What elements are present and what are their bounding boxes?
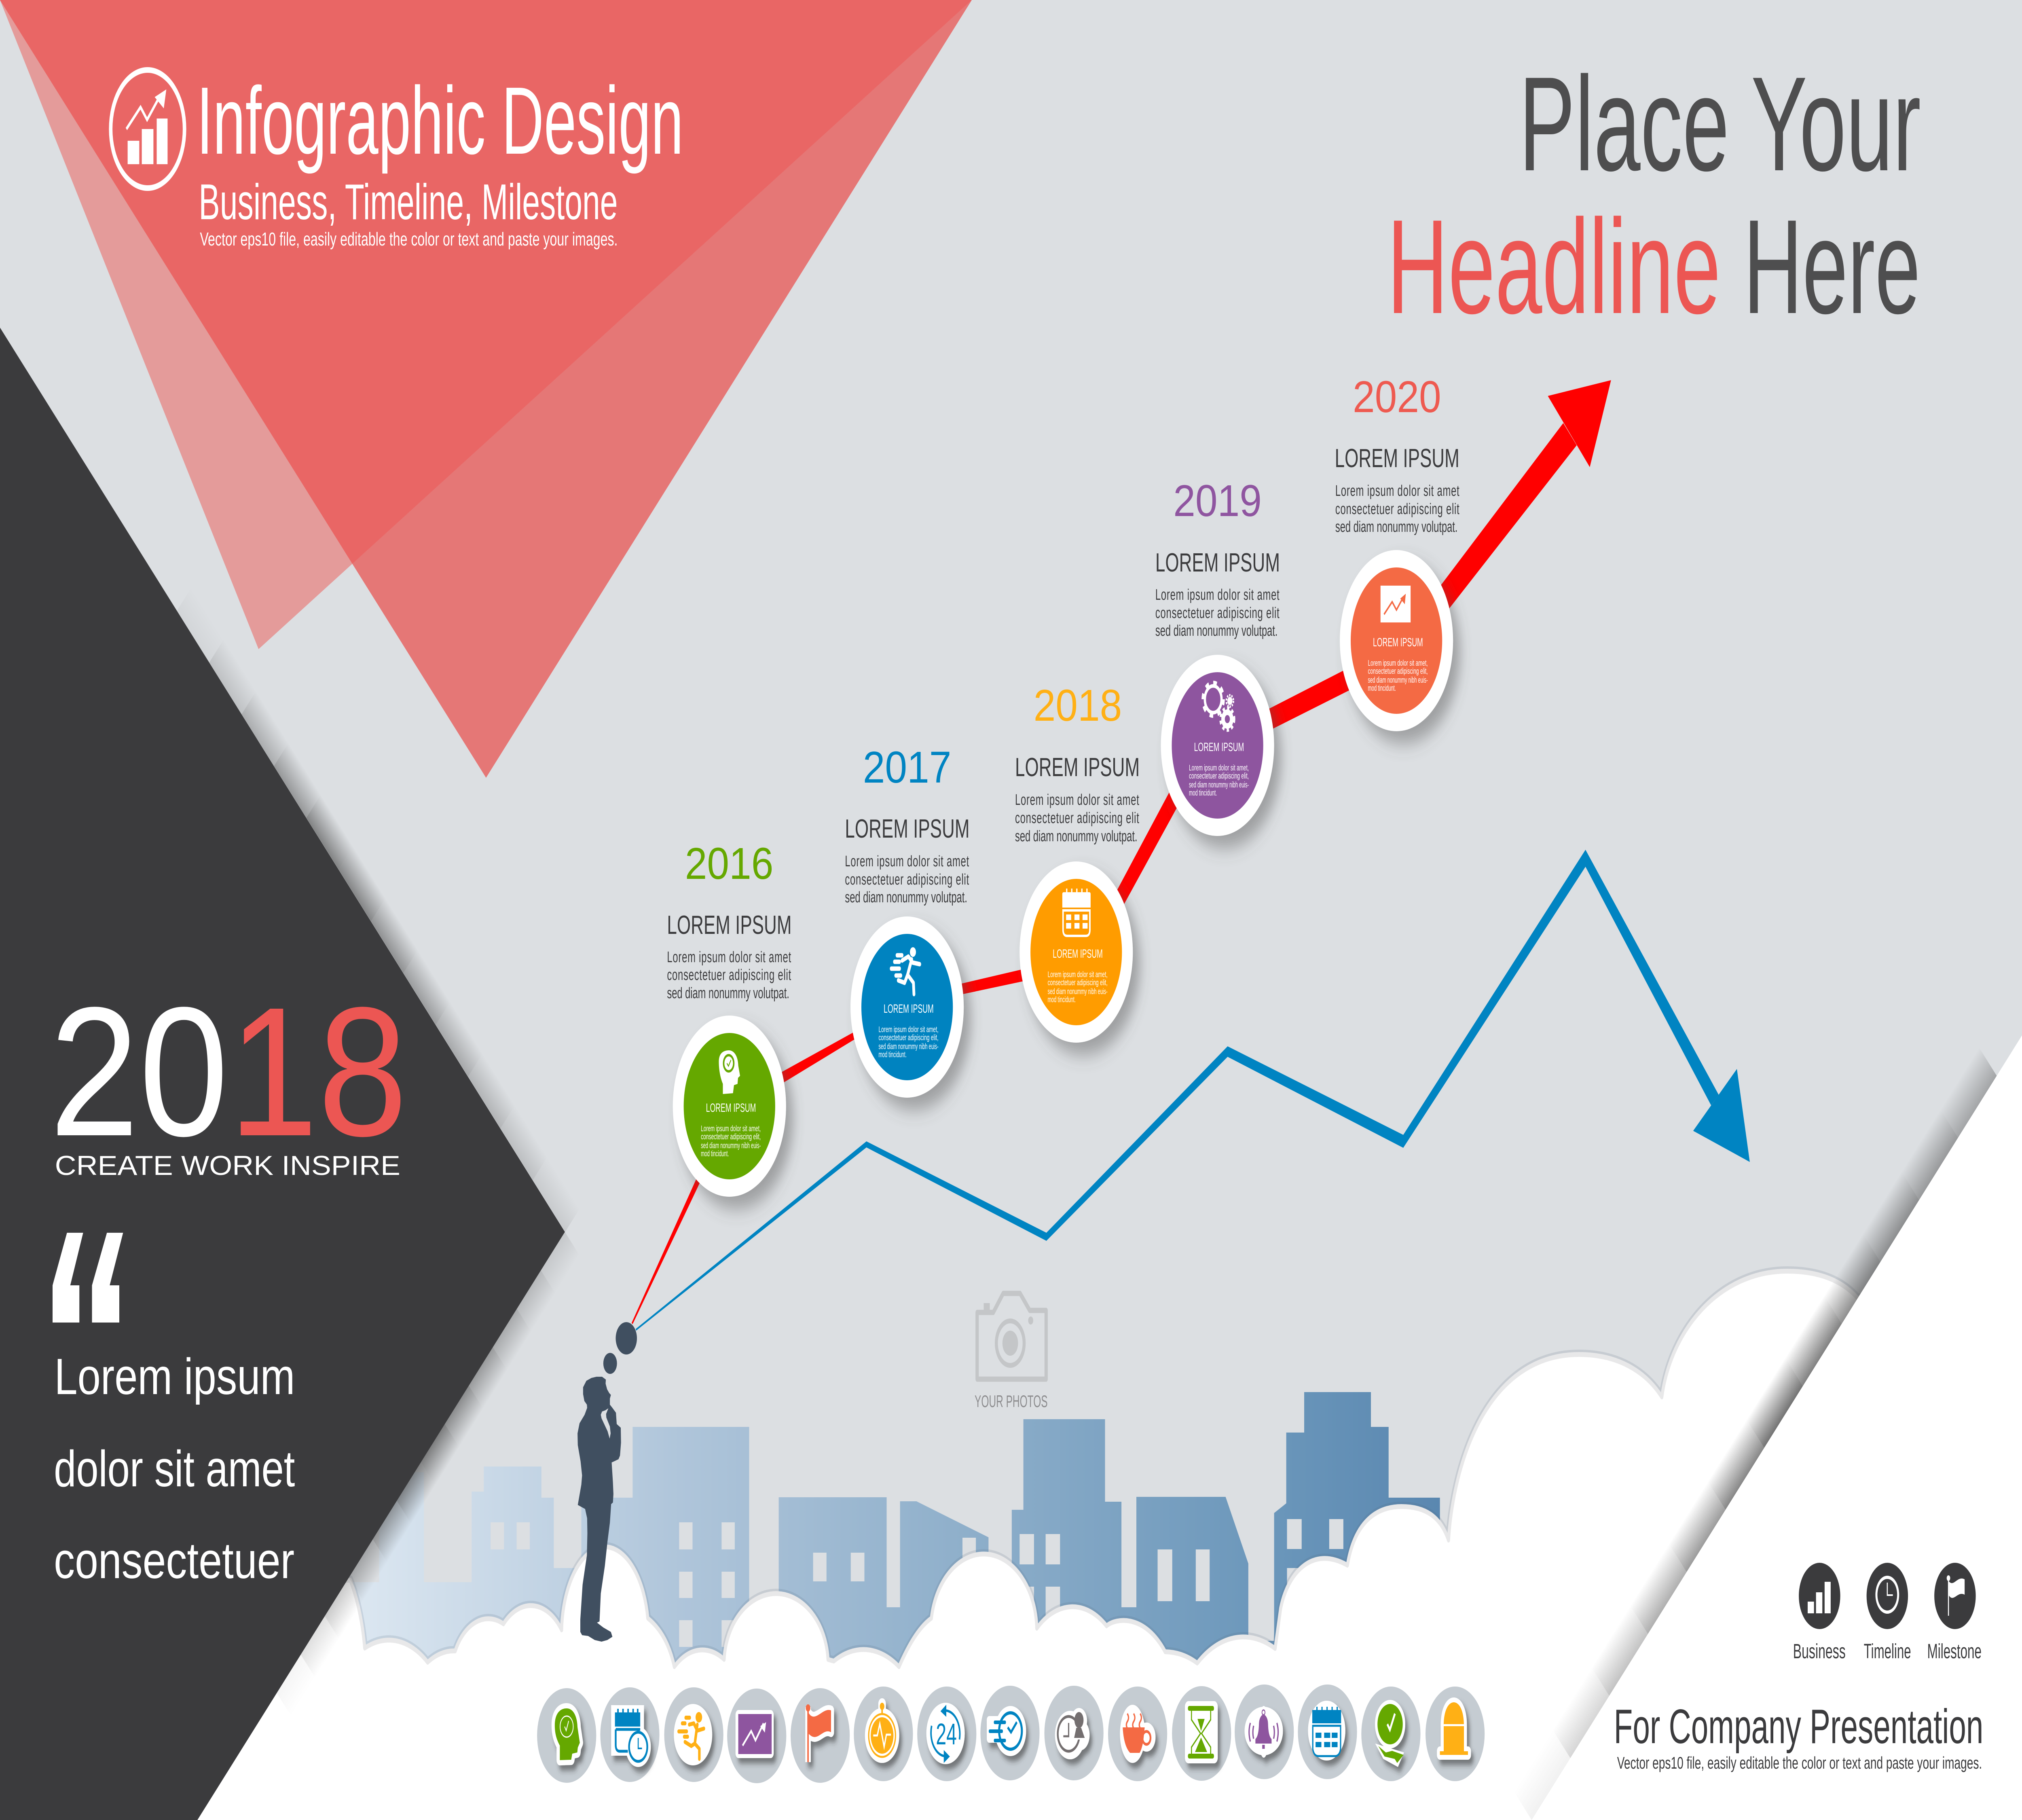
circle text 2019: LOREM IPSUM <box>1194 741 1244 754</box>
circle 2019 <box>1161 655 1274 836</box>
red timeline arrow <box>632 380 1611 1324</box>
heading 2020: LOREM IPSUM <box>1335 444 1459 473</box>
quote text: consectetuer <box>54 1532 294 1589</box>
icon: camera placeholder <box>977 1293 1046 1379</box>
body 2019: sed diam nonummy volutpat. <box>1155 622 1277 639</box>
headline: Place Your <box>1519 49 1921 199</box>
icon: milestone marker <box>1426 1687 1485 1781</box>
icon: flag <box>791 1688 850 1783</box>
shadow: page fold <box>1514 1048 1997 1820</box>
icon: stopwatch <box>854 1687 913 1781</box>
circle text 2018: mod tincidunt. <box>1048 995 1076 1004</box>
icon: bell <box>1235 1685 1294 1779</box>
icon: clock in hand <box>1361 1687 1420 1781</box>
icon labels: Business <box>1793 1640 1846 1663</box>
panel: dark triangle <box>0 328 565 1820</box>
year 2016: 2016 <box>685 839 773 889</box>
body 2019: Lorem ipsum dolor sit amet <box>1155 586 1280 603</box>
icon: calendar <box>1062 889 1091 936</box>
headline: Headline <box>1387 191 1721 342</box>
icon row <box>537 1685 1485 1783</box>
tagline: Vector eps10 file, easily editable the color or text and paste your images. <box>200 229 618 250</box>
footer heading: For Company Presentation <box>1614 1699 1983 1754</box>
circle text 2018: consectetuer adipiscing elit, <box>1048 978 1108 987</box>
icon: business <box>1799 1563 1840 1629</box>
footer note: Vector eps10 file, easily editable the color or text and paste your images. <box>1617 1754 1982 1773</box>
slogan: CREATE WORK INSPIRE <box>55 1151 400 1181</box>
icon: chart card <box>1381 586 1411 622</box>
milestone 2020 <box>1335 372 1459 731</box>
subtitle: Business, Timeline, Milestone <box>199 174 618 230</box>
circle 2020 <box>1340 550 1453 731</box>
title: Infographic Design <box>197 67 683 174</box>
heading 2016: LOREM IPSUM <box>667 910 792 940</box>
icon: 24 hours: 24 <box>936 1718 957 1751</box>
body 2016: Lorem ipsum dolor sit amet <box>667 948 791 965</box>
milestone 2016 <box>667 839 792 1197</box>
heading 2017: LOREM IPSUM <box>845 814 970 843</box>
icon: chart logo <box>111 70 184 188</box>
body 2020: consectetuer adipiscing elit <box>1335 500 1459 517</box>
body 2017: sed diam nonummy volutpat. <box>845 888 967 906</box>
body 2016: sed diam nonummy volutpat. <box>667 984 789 1001</box>
circle text 2018: Lorem ipsum dolor sit amet, <box>1048 970 1108 979</box>
milestone 2018 <box>1015 681 1140 1043</box>
headline <box>1387 49 1921 342</box>
body 2020 <box>1335 482 1459 535</box>
icon: hourglass <box>1172 1686 1231 1781</box>
big year 2018: 20 18 <box>50 969 408 1175</box>
body 2018: consectetuer adipiscing elit <box>1015 809 1139 826</box>
body 2018: Lorem ipsum dolor sit amet <box>1015 791 1139 808</box>
circle text 2019: sed diam nonummy nibh euis- <box>1189 780 1249 789</box>
circle text 2016: sed diam nonummy nibh euis- <box>701 1141 761 1150</box>
circle text 2016: consectetuer adipiscing elit, <box>701 1132 761 1141</box>
circle 2016 <box>673 1016 786 1197</box>
circle text 2016: mod tincidunt. <box>701 1149 729 1158</box>
body 2018: sed diam nonummy volutpat. <box>1015 827 1137 844</box>
icon labels: Timeline <box>1864 1640 1911 1663</box>
headline: Here <box>1743 191 1920 342</box>
quote text: Lorem ipsum <box>54 1348 295 1405</box>
circle text 2017: Lorem ipsum dolor sit amet, <box>878 1025 939 1034</box>
circle text 2016: LOREM IPSUM <box>706 1101 756 1115</box>
icon labels: Milestone <box>1927 1640 1982 1663</box>
icon: gears <box>1203 683 1234 730</box>
panel: red overlapping triangles <box>0 0 972 778</box>
year 2017: 2017 <box>863 743 951 792</box>
icon: clock person <box>1044 1686 1104 1780</box>
icon: head <box>719 1050 740 1094</box>
circle text 2016: Lorem ipsum dolor sit amet, <box>701 1124 761 1133</box>
icon labels <box>1793 1640 1982 1663</box>
circle text 2018 <box>1048 947 1108 1004</box>
quote text <box>54 1348 295 1589</box>
circle text 2020 <box>1368 636 1428 693</box>
circle text 2019: consectetuer adipiscing elit, <box>1189 771 1249 781</box>
circle text 2017: LOREM IPSUM <box>884 1002 934 1016</box>
body 2016: consectetuer adipiscing elit <box>667 966 791 983</box>
heading 2019: LOREM IPSUM <box>1155 548 1280 577</box>
circle text 2017: mod tincidunt. <box>878 1050 907 1059</box>
icon: checklist clock <box>980 1686 1040 1780</box>
body 2020: Lorem ipsum dolor sit amet <box>1335 482 1459 499</box>
icon: coffee cup <box>1108 1687 1167 1781</box>
circle text 2018: sed diam nonummy nibh euis- <box>1048 987 1108 996</box>
circle text 2019: mod tincidunt. <box>1189 788 1217 798</box>
body 2019 <box>1155 586 1280 639</box>
icon: runner <box>891 947 920 994</box>
body 2019: consectetuer adipiscing elit <box>1155 604 1280 621</box>
milestone 2017 <box>845 743 970 1098</box>
icon: timeline clock <box>1867 1563 1908 1629</box>
white clouds <box>0 1271 2022 1820</box>
circle text 2020: sed diam nonummy nibh euis- <box>1368 675 1428 685</box>
circle text 2019 <box>1189 741 1249 798</box>
body 2017 <box>845 852 969 906</box>
icon: milestone flag <box>1934 1563 1976 1629</box>
icon: runner <box>664 1687 723 1782</box>
circle text 2020: consectetuer adipiscing elit, <box>1368 667 1428 676</box>
circle text 2019: Lorem ipsum dolor sit amet, <box>1189 763 1249 772</box>
circle text 2018: LOREM IPSUM <box>1053 947 1103 961</box>
circle text 2017: sed diam nonummy nibh euis- <box>878 1042 939 1051</box>
icon: calendar grid <box>1298 1685 1357 1779</box>
year 2018: 2018 <box>1034 681 1122 730</box>
year 2019: 2019 <box>1173 476 1262 526</box>
icon: 24 hours <box>917 1687 976 1781</box>
icon: head check <box>537 1688 596 1783</box>
icon: chart <box>727 1689 786 1783</box>
body 2016 <box>667 948 791 1001</box>
shadow: dark panel <box>177 588 580 1716</box>
quote text: dolor sit amet <box>54 1441 295 1498</box>
body 2017: Lorem ipsum dolor sit amet <box>845 852 969 870</box>
body 2020: sed diam nonummy volutpat. <box>1335 518 1457 535</box>
circle text 2020: LOREM IPSUM <box>1373 636 1423 649</box>
panel: white folded corner <box>1532 1035 2022 1820</box>
heading 2018: LOREM IPSUM <box>1015 753 1140 782</box>
silhouette: thinking man <box>577 1322 637 1642</box>
circle text 2017: consectetuer adipiscing elit, <box>878 1033 939 1042</box>
circle text 2016 <box>701 1101 761 1158</box>
circle 2017 <box>850 916 964 1098</box>
camera caption: YOUR PHOTOS <box>975 1392 1048 1411</box>
circle text 2020: Lorem ipsum dolor sit amet, <box>1368 658 1428 668</box>
icon: quote mark <box>53 1233 123 1323</box>
body 2017: consectetuer adipiscing elit <box>845 870 969 888</box>
year 2020: 2020 <box>1353 372 1441 422</box>
blue trend arrow <box>636 850 1750 1331</box>
buildings skyline <box>328 1392 1440 1670</box>
circle text 2020: mod tincidunt. <box>1368 684 1396 693</box>
circle text 2017 <box>878 1002 939 1059</box>
icon: calendar clock <box>600 1687 660 1782</box>
milestone 2019 <box>1155 476 1280 836</box>
body 2018 <box>1015 791 1139 844</box>
circle 2018 <box>1019 861 1133 1043</box>
